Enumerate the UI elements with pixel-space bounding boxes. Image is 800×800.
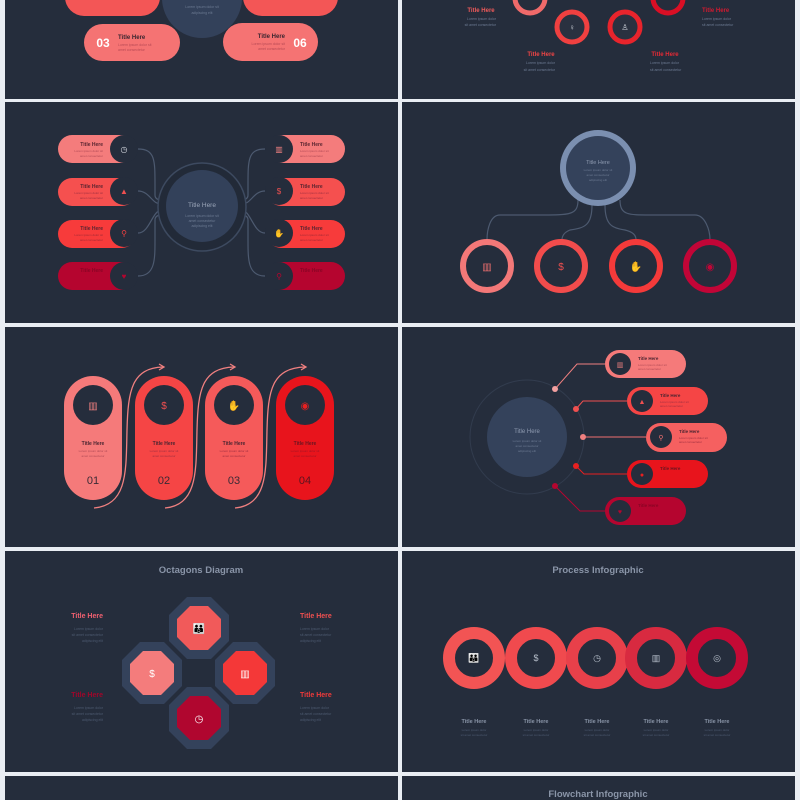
text blocks	[465, 8, 497, 27]
step labels: sit amet consectetur	[461, 733, 487, 737]
pill 01: Title Here	[82, 441, 105, 447]
text blocks: Lorem ipsum dolor	[74, 627, 104, 631]
panel: slide 2 left (mind map): Lorem ipsum dolor sit	[74, 191, 103, 195]
pill 06: amet consectetur	[258, 47, 286, 51]
panel: slide 4 left (octagons diagram): adipiscing elit	[300, 718, 321, 722]
panel: slide 4 left (octagons diagram): Lorem ipsum dolor	[300, 706, 330, 710]
ring icon bulb	[557, 12, 587, 42]
step labels: Lorem ipsum dolor	[585, 728, 609, 732]
panel: slide 3 right (radial pills): ▲	[639, 399, 645, 406]
panel: slide 5 right (flowchart): Flowchart Infographic	[548, 789, 648, 800]
pill 01: amet consectetur	[81, 454, 105, 458]
panel: slide 2 left (mind map): ⚲	[276, 272, 282, 281]
pills: ▥	[617, 362, 623, 369]
pill 03: 03	[96, 36, 110, 50]
panel: slide 4 left (octagons diagram): $	[149, 669, 155, 680]
center circle: Title Here	[514, 429, 541, 435]
step labels: sit amet consectetur	[523, 733, 549, 737]
pill 03: ✋	[228, 399, 240, 412]
pill 03: Title Here	[118, 35, 146, 41]
left pills: Title Here	[80, 142, 103, 148]
right pills: Title Here	[300, 142, 323, 148]
center circle: Lorem ipsum dolor sit	[513, 439, 542, 443]
panel: slide 2 left (mind map): Title Here	[80, 268, 103, 274]
panel: slide 1 right (ring circles): Title Here	[651, 52, 679, 58]
top circle: amet consectetur	[586, 173, 610, 177]
text blocks: Title Here	[71, 613, 103, 620]
right pills: ▥	[275, 145, 283, 154]
pill 01: ▥	[88, 401, 98, 412]
panel: slide 2 left (mind map): amet consectetur	[80, 238, 103, 242]
step labels: Title Here	[585, 719, 609, 725]
pill 03: amet consectetur	[118, 48, 146, 52]
text blocks: adipiscing elit	[82, 639, 103, 643]
panel: slide 3 right (radial pills): ♥	[618, 509, 622, 516]
step labels: Title Here	[705, 719, 729, 725]
panel: slide 1 right (ring circles): sit amet consectetur	[702, 23, 734, 27]
panel: slide 4 left (octagons diagram): adipiscing elit	[300, 639, 321, 643]
step labels: sit amet consectetur	[643, 733, 669, 737]
bottom ring icons: ▥	[482, 262, 492, 273]
panel: slide 3 right (radial pills): Title Here	[660, 393, 681, 398]
pill 04: 04	[299, 475, 311, 487]
pill 04: Title Here	[294, 441, 317, 447]
left pills: ◷	[121, 145, 128, 154]
title: Octagons Diagram	[159, 565, 243, 576]
panel: slide 3 right (radial pills): Title Here	[679, 429, 700, 434]
panel: slide 2 left (mind map): Title Here	[300, 268, 323, 274]
panel: slide 3 right (radial pills): Lorem ipsum dolor sit	[679, 436, 708, 440]
pill 04: ◉	[301, 401, 310, 412]
panel: slide 1 right (ring circles)	[402, 0, 795, 99]
step labels: Lorem ipsum dolor	[705, 728, 729, 732]
right pills: amet consectetur	[300, 154, 323, 158]
panel: slide 3 right (radial pills): Title Here	[660, 466, 681, 471]
center circle: adipiscing elit	[191, 11, 213, 15]
panel: slide 1 right (ring circles): Lorem ipsum dolor	[650, 61, 680, 65]
panel: slide 4 left (octagons diagram): ▥	[240, 669, 250, 680]
text blocks	[71, 613, 104, 643]
pill 01: 01	[87, 475, 99, 487]
pill 02: amet consectetur	[152, 454, 176, 458]
step labels: sit amet consectetur	[704, 733, 730, 737]
ring icon bulb: ♀	[569, 23, 575, 32]
step labels: Title Here	[524, 719, 548, 725]
step labels: sit amet consectetur	[584, 733, 610, 737]
panel: slide 2 left (mind map): amet consectetur	[300, 196, 323, 200]
pill 02: Lorem ipsum dolor sit	[150, 449, 178, 453]
panel: slide 3 right (radial pills): ●	[640, 472, 644, 479]
top circle	[560, 130, 636, 206]
pill 03	[84, 24, 180, 61]
panel: slide 1 right (ring circles): Lorem ipsum dolor	[702, 17, 732, 21]
octagons	[169, 597, 229, 659]
panel: slide 1 left (pills around circle)	[5, 0, 398, 99]
pill 02: $	[161, 401, 167, 412]
rings	[449, 633, 742, 683]
panel: slide 4 left (octagons diagram): ◷	[195, 714, 204, 725]
panel: slide 4 left (octagons diagram): Lorem ipsum dolor	[300, 627, 330, 631]
panel: slide 4 left (octagons diagram): Lorem ipsum dolor	[74, 706, 104, 710]
pill 03: Lorem ipsum dolor sit	[118, 43, 151, 47]
bottom ring icons	[463, 242, 511, 290]
step labels: Lorem ipsum dolor	[462, 728, 486, 732]
panel: slide 2 left (mind map): ♥	[122, 272, 127, 281]
ring icons: 👪	[468, 652, 480, 663]
panel: slide 1 right (ring circles): Title Here	[702, 8, 730, 14]
center circle	[162, 0, 242, 38]
panel: slide 2 left (mind map): amet consectetur	[80, 196, 103, 200]
connectors	[555, 364, 646, 511]
octagons: 👪	[193, 622, 205, 635]
ring icon user	[610, 12, 640, 42]
center circle	[158, 163, 246, 251]
panel: slide 3 right (radial pills): ⚲	[658, 434, 664, 442]
panel: slide 4 left (octagons diagram): Title Here	[300, 692, 332, 699]
panel: slide 3 left (vertical pills with arrows)	[5, 327, 398, 547]
pill 03: amet consectetur	[222, 454, 246, 458]
text blocks: Lorem ipsum dolor	[467, 17, 497, 21]
pill 06: 06	[293, 36, 307, 50]
left pills: Lorem ipsum dolor sit	[74, 149, 103, 153]
panel: slide 1 right (ring circles): sit amet consectetur	[524, 68, 556, 72]
title: Process Infographic	[552, 565, 644, 576]
panel: slide 5 left	[5, 776, 398, 800]
panel: slide 3 right (radial pills): amet consectetur	[660, 404, 683, 408]
panel: slide 2 right (hierarchy): $	[558, 262, 564, 273]
center circle: adipiscing elit	[191, 224, 213, 228]
panel: slide 2 left (mind map): Lorem ipsum dolor sit	[300, 191, 329, 195]
pill top right	[243, 0, 338, 16]
connectors	[487, 200, 710, 240]
panel: slide 1 right (ring circles): sit amet consectetur	[650, 68, 682, 72]
pill 03	[205, 376, 263, 500]
pill 06: Lorem ipsum dolor sit	[252, 42, 285, 46]
panel: slide 3 right (radial pills): Title Here	[638, 503, 659, 508]
panel: slide 2 left (mind map): ✋	[274, 228, 284, 238]
center circle: adipiscing elit	[518, 449, 536, 453]
pills: Lorem ipsum dolor sit	[638, 363, 667, 367]
panel: slide 4 left (octagons diagram): sit amet consectetur	[300, 712, 332, 716]
pill 04	[276, 376, 334, 500]
connectors	[138, 149, 265, 276]
panel: slide 2 left (mind map): ⚲	[121, 229, 127, 238]
panel: slide 4 left (octagons diagram): sit amet consectetur	[72, 712, 104, 716]
panel: slide 2 left (mind map): Title Here	[300, 184, 323, 190]
panel: slide 2 left (mind map): Title Here	[80, 184, 103, 190]
top circle: adipiscing elit	[589, 178, 607, 182]
panel: slide 2 right (hierarchy): ◉	[706, 262, 715, 273]
step labels	[461, 719, 730, 737]
panel: slide 4 left (octagons diagram): Title Here	[71, 692, 103, 699]
step labels: Title Here	[644, 719, 668, 725]
panel: slide 2 left (mind map): ▲	[120, 187, 128, 196]
pill 02	[135, 376, 193, 500]
pill 01	[64, 376, 122, 500]
panel: slide 3 right (radial pills)	[402, 327, 795, 547]
pill 03: Title Here	[223, 441, 246, 447]
right pills	[265, 135, 345, 163]
panel: slide 4 left (octagons diagram): Title Here	[300, 613, 332, 620]
panel: slide 1 right (ring circles): Title Here	[527, 52, 555, 58]
text blocks: sit amet consectetur	[465, 23, 497, 27]
panel: slide 4 left (octagons diagram): adipiscing elit	[82, 718, 103, 722]
pill 03: 03	[228, 475, 240, 487]
step labels: Title Here	[462, 719, 486, 725]
panel: slide 1 right (ring circles): Lorem ipsum dolor	[526, 61, 556, 65]
panel: slide 5 right (flowchart)	[402, 776, 795, 800]
panel: slide 2 right (hierarchy)	[402, 102, 795, 323]
pill 02: 02	[158, 475, 170, 487]
step labels: Lorem ipsum dolor	[644, 728, 668, 732]
pill top left	[65, 0, 160, 16]
center circle	[487, 397, 567, 477]
panel: slide 2 left (mind map): Title Here	[300, 226, 323, 232]
center circle: Title Here	[188, 202, 216, 209]
center circle: Lorem ipsum dolor sit	[185, 214, 219, 218]
ring icon user: ♙	[621, 23, 629, 32]
center circle: Lorem ipsum dolor sit	[185, 5, 219, 9]
left pills: amet consectetur	[80, 154, 103, 158]
ring icons: ▥	[652, 653, 660, 663]
panel: slide 2 left (mind map): Lorem ipsum dolor sit	[300, 233, 329, 237]
pill 02: Title Here	[153, 441, 176, 447]
panel: slide 2 left (mind map): $	[277, 187, 282, 196]
pills	[605, 350, 686, 378]
left pills	[58, 135, 138, 163]
ring icons	[468, 652, 721, 663]
panel: slide 4 right (process infographic)	[402, 551, 795, 772]
pill 06	[223, 23, 318, 61]
pill 03: Lorem ipsum dolor sit	[220, 449, 248, 453]
panel: slide 2 left (mind map)	[5, 102, 398, 323]
center circle: amet consectetur	[515, 444, 539, 448]
panel: slide 3 right (radial pills): Lorem ipsum dolor sit	[660, 400, 689, 404]
arrows	[94, 364, 306, 508]
right pills: Lorem ipsum dolor sit	[300, 149, 329, 153]
top circle: Lorem ipsum dolor sit	[584, 168, 612, 172]
pill 06: Title Here	[258, 34, 286, 40]
center circle: amet consectetur	[189, 219, 216, 223]
panel: slide 2 left (mind map): Title Here	[80, 226, 103, 232]
pill 01: Lorem ipsum dolor sit	[79, 449, 108, 453]
top circle: Title Here	[586, 160, 610, 166]
pills: amet consectetur	[638, 367, 661, 371]
panel: slide 3 right (radial pills): amet consectetur	[679, 440, 702, 444]
ring icons: $	[533, 653, 539, 663]
pill 04: amet consectetur	[293, 454, 317, 458]
step labels: Lorem ipsum dolor	[524, 728, 548, 732]
panel: slide 2 left (mind map): Lorem ipsum dolor sit	[74, 233, 103, 237]
pill 04: Lorem ipsum dolor sit	[291, 449, 320, 453]
text blocks: sit amet consectetur	[72, 633, 104, 637]
panel: slide 2 left (mind map): amet consectetur	[300, 238, 323, 242]
pills: Title Here	[638, 356, 659, 361]
panel: slide 4 left (octagons diagram)	[5, 551, 398, 772]
panel: slide 4 left (octagons diagram): sit amet consectetur	[300, 633, 332, 637]
ring icons: ◷	[593, 653, 601, 663]
panel: slide 2 right (hierarchy): ✋	[630, 260, 642, 273]
ring icons: ◎	[713, 653, 721, 663]
text blocks: Title Here	[467, 8, 495, 14]
